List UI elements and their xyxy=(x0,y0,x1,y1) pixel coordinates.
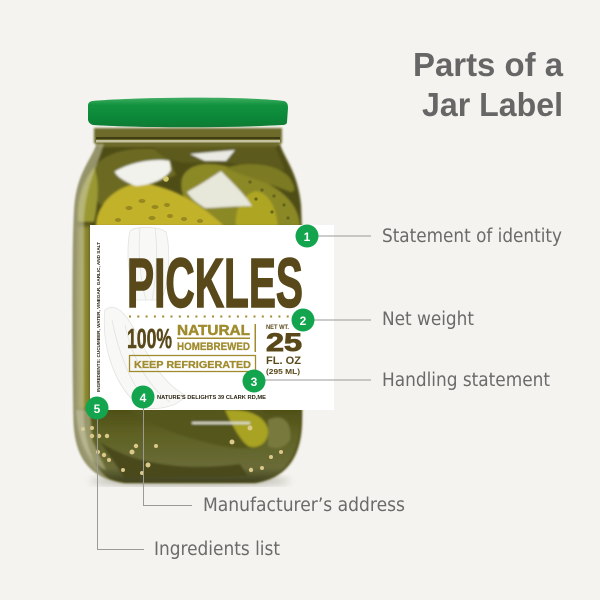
callout 4: 4 xyxy=(140,391,147,405)
brine and pickles below label xyxy=(76,410,301,482)
jar body xyxy=(73,144,303,483)
callout 4: Manufacturer’s address xyxy=(203,495,405,516)
dotted divider xyxy=(129,316,298,318)
callout 1: Statement of identity xyxy=(382,226,562,247)
pickle watermark xyxy=(104,227,185,408)
net weight xyxy=(266,325,302,376)
mustard seed upper xyxy=(163,176,169,182)
manufacturer address: NATURE'S DELIGHTS 39 CLARK RD,ME xyxy=(157,395,266,401)
product name: PICKLES xyxy=(127,244,303,322)
title: Parts of a xyxy=(413,46,564,83)
net weight: (295 ML) xyxy=(266,369,300,376)
callout 1: 1 xyxy=(304,230,311,244)
100%: 100% xyxy=(127,323,172,354)
callout 1 xyxy=(296,224,562,248)
callout 3: 3 xyxy=(251,375,258,389)
homebrewed: HOMEBREWED xyxy=(177,341,250,353)
pickle bumps xyxy=(115,199,203,223)
label panel xyxy=(90,225,334,410)
ingredients list: INGREDIENTS: CUCUMBER, WATER, VINEGAR, GARLIC, AND SALT xyxy=(96,242,101,392)
natural: NATURAL xyxy=(177,322,250,339)
pickle jar xyxy=(73,98,303,486)
jar edge glass xyxy=(77,226,90,410)
jar shadow xyxy=(90,476,290,486)
title: Jar Label xyxy=(422,86,563,123)
upper pickles xyxy=(78,146,300,226)
callout 5: 5 xyxy=(94,402,101,416)
net weight: NET WT. xyxy=(266,325,289,331)
callout 4 xyxy=(132,386,405,516)
net weight: 25 xyxy=(266,329,302,357)
callout 5 xyxy=(86,396,280,560)
callout 2: Net weight xyxy=(382,309,474,330)
callout 3 xyxy=(242,370,550,392)
lid xyxy=(88,98,288,127)
callout 3: Handling statement xyxy=(382,370,550,391)
keep refrigerated box xyxy=(130,356,256,372)
net weight: FL. OZ xyxy=(266,355,301,367)
callout 5: Ingredients list xyxy=(154,539,280,560)
callout 2 xyxy=(292,308,474,332)
vertical divider xyxy=(254,324,256,352)
product label xyxy=(90,225,334,410)
mustard seeds xyxy=(81,426,283,475)
callout 2: 2 xyxy=(300,314,307,328)
keep refrigerated box: KEEP REFRIGERATED xyxy=(134,359,251,371)
rule under natural xyxy=(177,338,250,339)
title xyxy=(413,46,564,123)
jar neck xyxy=(94,128,282,147)
glass edge highlights xyxy=(73,144,110,480)
